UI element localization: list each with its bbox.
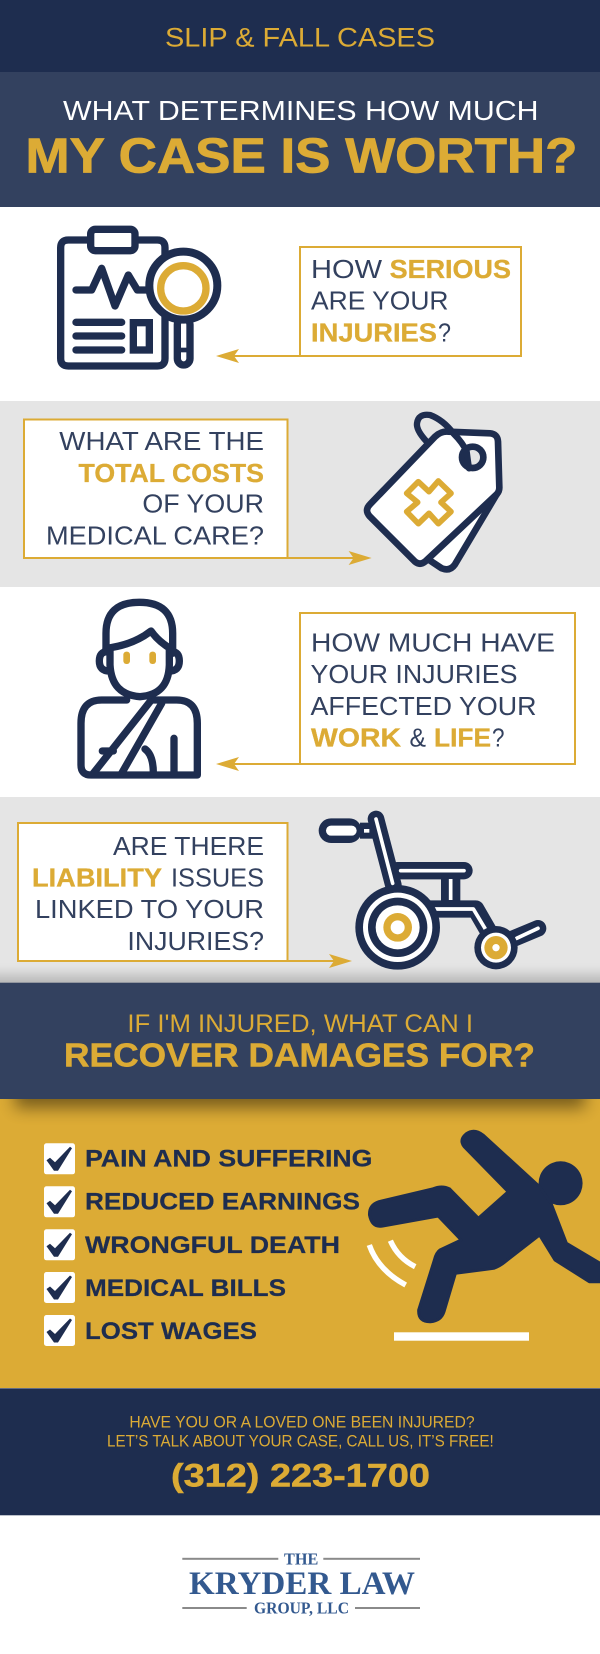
checklist: [44, 1143, 372, 1346]
icon: person slipping and falling: [369, 1131, 600, 1341]
callout: work and life: &: [410, 725, 426, 753]
call to action text: LET’S TALK ABOUT YOUR CASE, CALL US, IT’S FREE!: [107, 1432, 494, 1450]
icon: wheelchair: [319, 818, 538, 970]
callout: work and life: YOUR INJURIES: [310, 661, 518, 689]
icon: person with arm in sling: [81, 602, 197, 775]
panel: work and life: [0, 587, 600, 797]
callout: how serious: INJURIES: [311, 320, 437, 348]
heading line two: RECOVER DAMAGES FOR?: [64, 1038, 535, 1075]
panel: title: [0, 72, 600, 207]
panel: liability issues: [0, 797, 600, 983]
arrow: [216, 757, 300, 771]
arrow: [216, 349, 300, 363]
heading line one: IF I'M INJURED, WHAT CAN I: [127, 1010, 473, 1038]
callout: liability: LINKED TO YOUR: [35, 896, 264, 924]
title line one: WHAT DETERMINES HOW MUCH: [63, 95, 538, 126]
item: wrongful death: [44, 1229, 340, 1260]
logo: the kryder law group: KRYDER LAW: [189, 1566, 415, 1602]
panel: top banner: [0, 0, 600, 72]
item: pain and suffering: PAIN AND SUFFERING: [85, 1146, 372, 1173]
callout: total costs: WHAT ARE THE: [59, 428, 264, 456]
panel: call to action: [0, 1388, 600, 1515]
callout: how serious: [300, 247, 521, 356]
callout: work and life: [300, 613, 575, 764]
arrow: [287, 954, 352, 968]
callout: total costs: [24, 420, 288, 558]
item: medical bills: [44, 1272, 286, 1303]
callout: how serious: ?: [438, 320, 451, 348]
callout: total costs: OF YOUR: [142, 491, 264, 519]
callout: how serious: SERIOUS: [390, 256, 511, 284]
item: medical bills: MEDICAL BILLS: [85, 1275, 286, 1302]
callout: liability: ISSUES: [171, 865, 264, 893]
arrow: [287, 551, 372, 565]
callout: work and life: ?: [492, 725, 504, 753]
heading: slip and fall cases: SLIP & FALL CASES: [165, 23, 435, 53]
logo: the kryder law group: THE: [284, 1549, 318, 1568]
callout: liability: INJURIES?: [127, 928, 264, 956]
item: reduced earnings: [44, 1186, 360, 1217]
call to action text: HAVE YOU OR A LOVED ONE BEEN INJURED?: [129, 1413, 475, 1431]
callout: work and life: LIFE: [434, 725, 491, 753]
panel: damages you can recover: [0, 1070, 600, 1388]
callout: how serious: ARE YOUR: [311, 287, 448, 315]
callout: how serious: HOW: [311, 256, 382, 284]
callout: work and life: AFFECTED YOUR: [310, 693, 536, 721]
icon: clipboard and magnifying glass: [61, 229, 217, 366]
callout: total costs: MEDICAL CARE?: [46, 523, 264, 551]
call to action text: [107, 1413, 494, 1450]
callout: liability: LIABILITY: [32, 865, 162, 893]
phone number: (312) 223-1700: [171, 1458, 430, 1494]
item: lost wages: LOST WAGES: [85, 1318, 257, 1345]
callout: liability: ARE THERE: [113, 833, 264, 861]
item: lost wages: [44, 1315, 257, 1346]
callout: total costs: TOTAL COSTS: [78, 460, 264, 488]
icon: medical price tags: [367, 415, 499, 569]
item: reduced earnings: REDUCED EARNINGS: [85, 1188, 360, 1216]
panel: recover damages heading: [0, 983, 600, 1099]
item: wrongful death: WRONGFUL DEATH: [85, 1232, 340, 1259]
title line two: MY CASE IS WORTH?: [26, 130, 578, 184]
logo: the kryder law group: GROUP, LLC: [254, 1598, 349, 1617]
callout: work and life: HOW MUCH HAVE: [311, 630, 555, 658]
callout: liability: [18, 823, 288, 961]
callout: work and life: WORK: [311, 725, 402, 753]
item: pain and suffering: [44, 1143, 372, 1174]
panel: how serious are your injuries: [0, 207, 600, 401]
logo: the kryder law group: [182, 1549, 420, 1617]
panel: total costs of medical care: [0, 401, 600, 587]
